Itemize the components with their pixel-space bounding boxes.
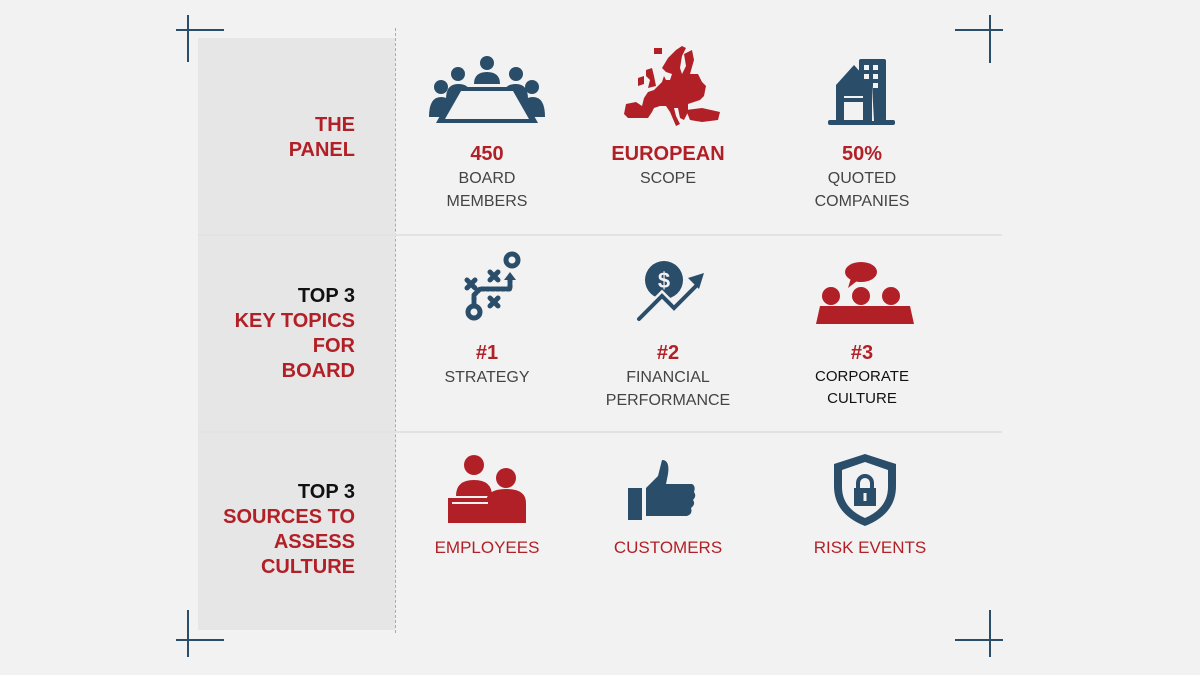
text: #2 bbox=[657, 342, 679, 364]
text: #3 bbox=[851, 342, 873, 364]
row label: key topics: TOP 3 bbox=[298, 285, 355, 307]
text: RISK EVENTS bbox=[814, 538, 926, 557]
text: COMPANIES bbox=[815, 193, 909, 210]
row label: sources: TOP 3 bbox=[298, 481, 355, 503]
row label: sources bbox=[223, 481, 355, 578]
column texts row 2: #1 bbox=[476, 342, 498, 364]
column texts row 1: 450 bbox=[470, 143, 504, 165]
icon: board meeting bbox=[429, 56, 545, 123]
text: PERFORMANCE bbox=[606, 392, 730, 409]
row label: the panel: THE bbox=[315, 114, 355, 136]
column texts row 1 bbox=[447, 143, 527, 210]
text: QUOTED bbox=[828, 170, 896, 187]
row label: sources: SOURCES TO bbox=[223, 506, 355, 528]
icon: strategy bbox=[464, 252, 520, 320]
column texts row 2 bbox=[444, 342, 530, 386]
icon: financial bbox=[636, 261, 704, 322]
text: EUROPEAN bbox=[611, 143, 725, 165]
icon: thumbs up bbox=[628, 460, 696, 520]
column texts row 2: STRATEGY bbox=[444, 369, 530, 386]
left panel background bbox=[198, 38, 395, 630]
row label: sources: ASSESS bbox=[274, 531, 355, 553]
row label: the panel bbox=[289, 114, 355, 161]
text: CULTURE bbox=[827, 390, 897, 407]
column texts row 3: EMPLOYEES bbox=[435, 538, 539, 557]
column texts row 1: MEMBERS bbox=[447, 193, 527, 210]
column texts row 1: BOARD bbox=[459, 170, 515, 187]
icon: europe map bbox=[624, 46, 720, 126]
text: CUSTOMERS bbox=[614, 538, 722, 557]
text: FINANCIAL bbox=[626, 369, 710, 386]
row label: the panel: PANEL bbox=[289, 139, 355, 161]
icon: financial: $ bbox=[658, 268, 670, 293]
row label: key topics bbox=[235, 285, 355, 382]
row label: sources: CULTURE bbox=[261, 556, 355, 578]
row label: key topics: FOR bbox=[313, 335, 355, 357]
text: SCOPE bbox=[640, 170, 696, 187]
row label: key topics: KEY TOPICS bbox=[235, 310, 355, 332]
icon: building bbox=[828, 59, 895, 125]
icon: employees bbox=[448, 455, 526, 523]
text: CORPORATE bbox=[815, 368, 909, 385]
text: 50% bbox=[842, 143, 882, 165]
icon: shield lock bbox=[834, 454, 896, 526]
row label: key topics: BOARD bbox=[282, 360, 355, 382]
icon: corporate culture bbox=[816, 262, 914, 324]
